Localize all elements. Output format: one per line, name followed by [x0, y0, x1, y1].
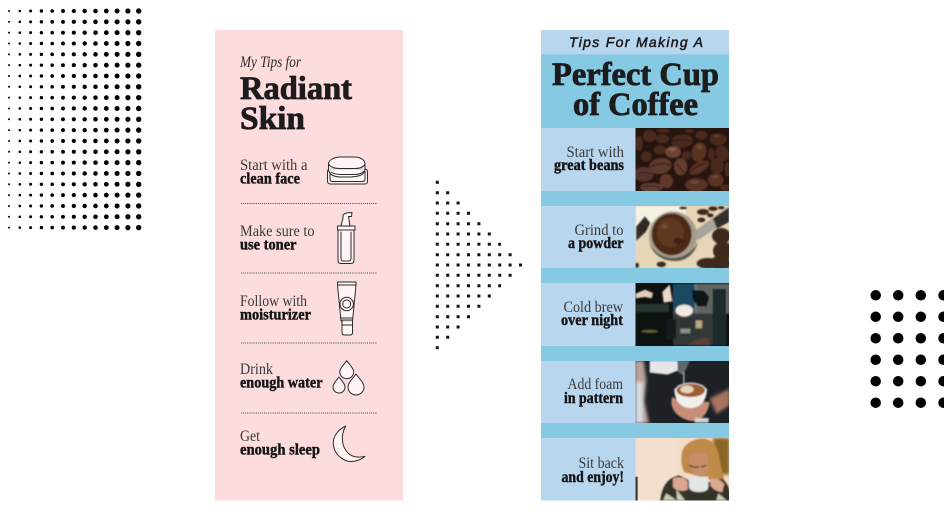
tip text: clean face: Start with a [240, 157, 308, 174]
halftone dot field: top left [9, 11, 139, 229]
panel: radiant skin tips [215, 30, 403, 500]
tip text: in pattern: in pattern [564, 390, 623, 407]
tip text: enough water: enough water [240, 374, 323, 392]
title: perfect cup of coffee: of Coffee [573, 87, 698, 123]
icon: cream jar [328, 157, 368, 184]
tip text: great beans [554, 144, 624, 174]
icon: water drops [333, 361, 364, 395]
icon: moisturizer tube [338, 282, 356, 335]
tip text: use toner [240, 223, 314, 254]
photo: ground coffee in portafilter [635, 206, 733, 271]
photo: latte art in cup [635, 361, 730, 424]
tip text: clean face: clean face [240, 170, 300, 188]
tip text: moisturizer: Follow with [240, 293, 307, 310]
icon: toner bottle [338, 212, 355, 264]
tip text: enough sleep: enough sleep [240, 442, 320, 458]
tip text: in pattern: Add foam [568, 376, 623, 393]
title: perfect cup of coffee: Perfect Cup [552, 57, 719, 93]
tip text: and enjoy: and enjoy! [562, 469, 624, 486]
halftone dot field: right edge [876, 295, 944, 404]
photo: woman sipping coffee [635, 438, 732, 501]
tip text: a powder [568, 222, 624, 252]
tip text: enough water: Drink [240, 361, 273, 378]
tip text: use toner: use toner [240, 236, 297, 254]
tip text: moisturizer [240, 293, 311, 324]
tip text: over night [561, 299, 624, 329]
heading: my tips for: My Tips for [239, 54, 302, 71]
tip text: and enjoy [562, 455, 624, 486]
photo: espresso machine in cafe [635, 283, 730, 346]
tip text: over night: over night [561, 312, 624, 329]
title: perfect cup of coffee [552, 57, 719, 123]
tip text: great beans: great beans [554, 157, 624, 174]
tip text: enough water [240, 361, 323, 392]
tip text: use toner: Make sure to [240, 223, 314, 240]
tip text: in pattern [564, 376, 623, 407]
title: radiant skin [240, 71, 352, 137]
tip text: and enjoy: Sit back [578, 455, 624, 472]
tip text: enough sleep [240, 428, 320, 458]
heading: tips for making a: Tips For Making A [569, 34, 703, 50]
tip text: a powder: Grind to [574, 222, 624, 239]
tip text: over night: Cold brew [564, 299, 623, 316]
tip text: moisturizer: moisturizer [240, 306, 311, 324]
tip text: a powder: a powder [568, 235, 624, 252]
icon: crescent moon [333, 426, 365, 462]
dotted dividers [241, 204, 377, 413]
tip text: clean face [240, 157, 308, 188]
title: radiant skin: Radiant [240, 71, 352, 107]
tip text: great beans: Start with [566, 144, 624, 161]
title: radiant skin: Skin [240, 101, 305, 137]
panel: perfect cup of coffee tips [541, 30, 733, 501]
photo: coffee beans [634, 128, 732, 192]
tip text: enough sleep: Get [240, 428, 260, 445]
arrow: halftone triangle pointing right [436, 182, 522, 348]
